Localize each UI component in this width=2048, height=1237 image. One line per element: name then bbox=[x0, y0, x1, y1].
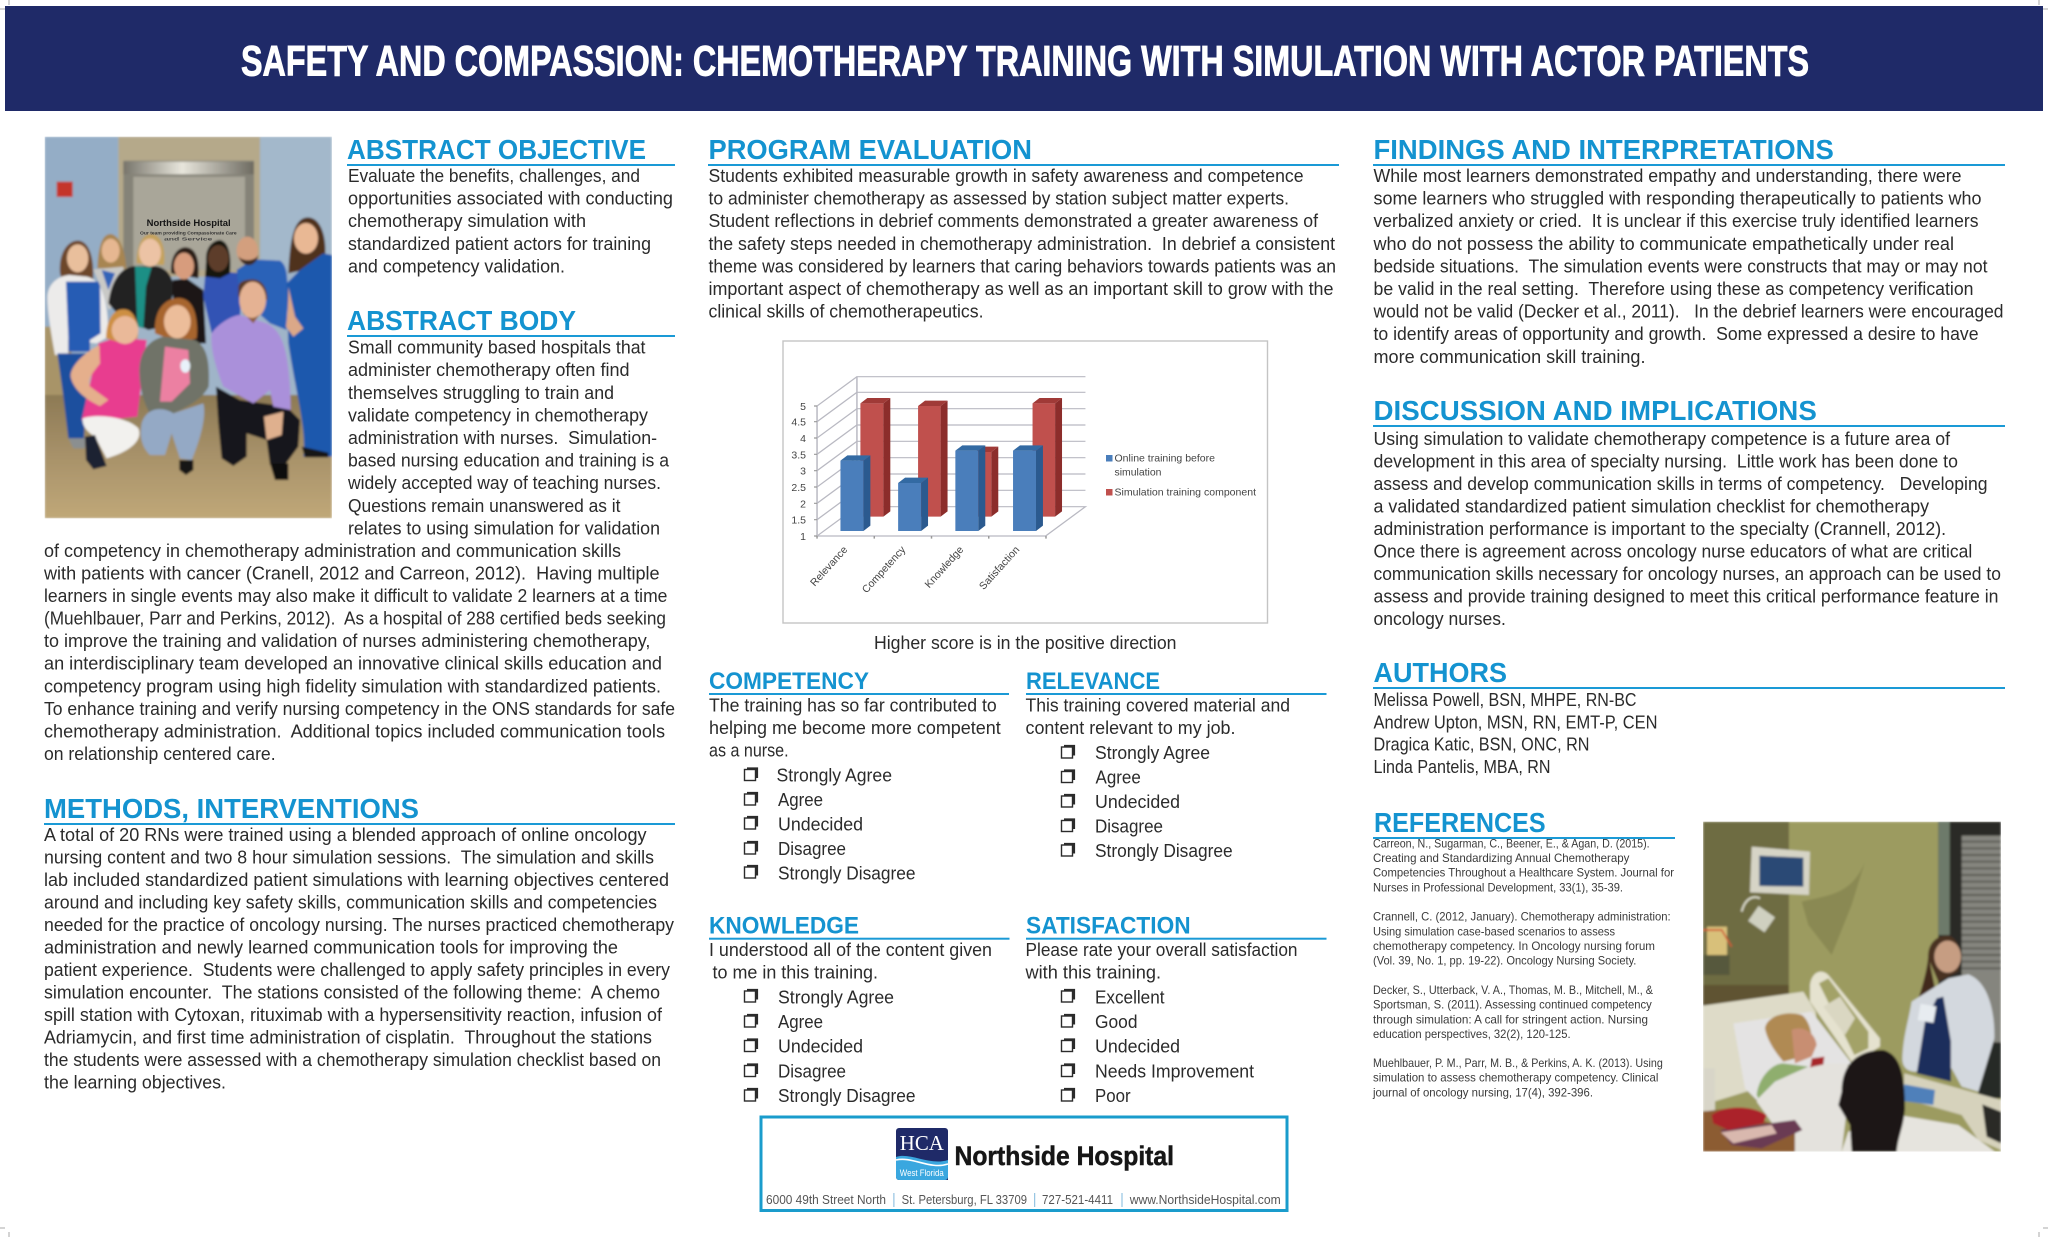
text: methods body: the students were assessed with a chemotherapy simulation checklist based on bbox=[44, 1050, 661, 1070]
back row bbox=[60, 241, 93, 285]
text: knowledge question: I understood all of the content given bbox=[709, 940, 992, 960]
text: methods body: around and including key safety skills, communication skills and competencies bbox=[44, 892, 657, 912]
heading: references: REFERENCES bbox=[1374, 807, 1546, 838]
checklist: relevance options: Disagree bbox=[1095, 817, 1163, 837]
heading: abstract body: ABSTRACT BODY bbox=[347, 305, 576, 336]
panel: findings and interpretations bbox=[1372, 134, 2005, 367]
panel: satisfaction survey bbox=[1024, 912, 1326, 1106]
text: reference list: Carreon, N., Sugarman, C., Beener, E., & Agan, D. (2015). bbox=[1373, 836, 1650, 850]
heading: discussion: DISCUSSION AND IMPLICATIONS bbox=[1374, 395, 1817, 426]
text: abstract objective body: standardized patient actors for training bbox=[348, 234, 651, 254]
chart legend: simulation bbox=[1114, 466, 1162, 478]
text: methods body: A total of 20 RNs were trained using a blended approach of online oncology bbox=[44, 825, 646, 845]
contact details: 727-521-4411 bbox=[1042, 1192, 1113, 1207]
checklist: satisfaction options: Needs Improvement bbox=[1095, 1062, 1254, 1082]
text: abstract body: (Muehlbauer, Parr and Perkins, 2012). As a hospital of 288 certified beds seeking bbox=[44, 609, 666, 629]
text: methods body: needed for the practice of oncology nursing. The nurses practiced chemotherapy bbox=[44, 915, 674, 935]
checklist: competency options: Undecided bbox=[778, 814, 863, 834]
contact details: 6000 49th Street North bbox=[766, 1192, 886, 1207]
panel: abstract body bbox=[43, 305, 675, 764]
panel: methods, interventions bbox=[44, 793, 675, 1093]
text: author names: Dragica Katic, BSN, ONC, RN bbox=[1374, 735, 1590, 755]
text: abstract body bbox=[43, 338, 675, 764]
text: abstract objective body: opportunities associated with conducting bbox=[348, 189, 673, 209]
chart x axis labels: Knowledge bbox=[923, 544, 966, 591]
checklist: satisfaction options: Undecided bbox=[1095, 1036, 1180, 1056]
bar chart: training scores bbox=[783, 341, 1268, 623]
text: abstract body: relates to using simulation for validation bbox=[348, 518, 660, 538]
text: methods body: lab included standardized patient simulations with learning objectives centered bbox=[44, 870, 669, 890]
chart y axis labels: 2 bbox=[800, 498, 806, 510]
photo: hospital room simulation bbox=[1703, 822, 2001, 1152]
text: knowledge question bbox=[709, 940, 992, 982]
text: reference list: journal of oncology nursing, 17(4), 392-396. bbox=[1372, 1085, 1593, 1099]
checklist: competency options bbox=[744, 766, 916, 883]
panel: references bbox=[1372, 807, 1675, 1099]
text: findings body: more communication skill training. bbox=[1374, 347, 1646, 367]
text: abstract body: administration with nurses. Simulation- bbox=[348, 428, 657, 448]
text: abstract body: validate competency in chemotherapy bbox=[348, 405, 648, 425]
chart caption: Higher score is in the positive direction bbox=[874, 633, 1176, 653]
text: discussion body: assess and develop communication skills in terms of competency. Developing bbox=[1374, 474, 1988, 494]
checklist: relevance options: Strongly Disagree bbox=[1095, 841, 1233, 861]
text: methods body: spill station with Cytoxan, rituximab with a hypersensitivity reaction, infusion of bbox=[44, 1005, 663, 1025]
chart y axis labels: 4 bbox=[800, 433, 806, 445]
text: knowledge question: to me in this training. bbox=[712, 962, 878, 982]
text: author names: Andrew Upton, MSN, RN, EMT-P, CEN bbox=[1374, 712, 1658, 732]
text: reference list: Competencies Throughout a Healthcare System. Journal for bbox=[1373, 866, 1674, 880]
text: discussion body: assess and provide training designed to meet this critical performance feature in bbox=[1374, 587, 1998, 607]
text: methods body: simulation encounter. The stations consisted of the following theme: A chemo bbox=[44, 982, 660, 1002]
text: findings body: would not be valid (Decker et al., 2011). In the debrief learners were encouraged bbox=[1373, 302, 2004, 322]
text: discussion body: communication skills necessary for oncology nurses, an approach can be used to bbox=[1374, 564, 2001, 584]
chart x axis labels: Satisfaction bbox=[977, 544, 1022, 592]
text: abstract body: an interdisciplinary team developed an innovative clinical skills education and bbox=[44, 654, 662, 674]
checklist: competency options: Disagree bbox=[778, 839, 846, 859]
text: program evaluation body: to administer chemotherapy as assessed by station subject matter experts. bbox=[708, 189, 1289, 209]
text: reference list: Crannell, C. (2012, January). Chemotherapy administration: bbox=[1373, 910, 1671, 924]
text: reference list: education perspectives, 32(2), 120-125. bbox=[1373, 1027, 1571, 1041]
text: abstract body: to improve the training and validation of nurses administering chemotherapy, bbox=[44, 631, 650, 651]
text: abstract objective body: Evaluate the benefits, challenges, and bbox=[348, 166, 640, 186]
text: reference list: chemotherapy competency. In Oncology nursing forum bbox=[1373, 939, 1655, 953]
text: satisfaction question: with this training. bbox=[1024, 962, 1161, 982]
text: methods body: nursing content and two 8 hour simulation sessions. The simulation and skills bbox=[44, 848, 654, 868]
text: program evaluation body: Students exhibited measurable growth in safety awareness and competence bbox=[708, 166, 1304, 186]
text: discussion body: oncology nurses. bbox=[1374, 609, 1506, 629]
chart x axis labels: Competency bbox=[860, 543, 909, 596]
text: findings body: who do not possess the ability to communicate empathetically under real bbox=[1372, 234, 1954, 254]
text: abstract body: administer chemotherapy often find bbox=[348, 360, 630, 380]
text: abstract body: chemotherapy administration. Additional topics included communication tools bbox=[44, 721, 665, 741]
text: program evaluation body: the safety steps needed in chemotherapy administration. In debrief a consistent bbox=[708, 234, 1335, 254]
text: reference list: Creating and Standardizing Annual Chemotherapy bbox=[1373, 851, 1629, 865]
blue bars: online training bbox=[840, 445, 1043, 531]
text: abstract body: themselves struggling to train and bbox=[348, 383, 614, 403]
checklist: satisfaction options: Good bbox=[1095, 1012, 1138, 1032]
chart y axis labels: 1 bbox=[800, 531, 806, 543]
text: abstract body: learners in single events may also make it difficult to validate 2 learners at a time bbox=[44, 586, 667, 606]
text: abstract body: on relationship centered care. bbox=[44, 744, 276, 764]
checklist: satisfaction options: Poor bbox=[1095, 1086, 1131, 1106]
heading: abstract objective: ABSTRACT OBJECTIVE bbox=[347, 134, 646, 165]
sign text in photo: and Service bbox=[164, 237, 213, 242]
heading: competency: COMPETENCY bbox=[709, 668, 869, 695]
text: findings body: While most learners demonstrated empathy and understanding, there were bbox=[1374, 166, 1962, 186]
text: findings body: to identify areas of opportunity and growth. Some expressed a desire to have bbox=[1374, 324, 1978, 344]
text: discussion body: Once there is agreement across oncology nurse educators of what are critical bbox=[1374, 542, 1972, 562]
text: abstract objective body: and competency validation. bbox=[348, 256, 565, 276]
text: abstract body: To enhance training and verify nursing competency in the ONS standards for safe bbox=[44, 699, 675, 719]
chart y axis labels: 3.5 bbox=[791, 450, 806, 462]
panel: competency survey bbox=[709, 668, 1009, 883]
text: author names: Linda Pantelis, MBA, RN bbox=[1374, 757, 1550, 777]
chart y axis labels: 1.5 bbox=[791, 514, 806, 526]
checklist: knowledge options bbox=[744, 987, 916, 1106]
checklist: knowledge options: Agree bbox=[778, 1012, 823, 1032]
chart y axis labels: 3 bbox=[800, 466, 806, 478]
checklist: knowledge options: Strongly Agree bbox=[778, 987, 894, 1007]
text: abstract objective body bbox=[348, 166, 673, 276]
chart legend: Online training before bbox=[1114, 452, 1215, 464]
heading: methods, interventions: METHODS, INTERVENTIONS bbox=[44, 793, 419, 824]
text: findings body: bedside situations. The simulation events were constructs that may or may not bbox=[1374, 256, 1988, 276]
text: abstract body: widely accepted way of teaching nurses. bbox=[347, 473, 661, 493]
text: reference list: simulation to assess chemotherapy competency. Clinical bbox=[1373, 1071, 1658, 1085]
text: satisfaction question bbox=[1024, 940, 1298, 982]
text: discussion body: a validated standardized patient simulation checklist for chemotherapy bbox=[1374, 496, 1929, 516]
text: abstract body: with patients with cancer (Cranell, 2012 and Carreon, 2012). Having multiple bbox=[43, 564, 660, 584]
title banner bbox=[5, 6, 2043, 111]
panel: authors bbox=[1373, 657, 2005, 777]
text: program evaluation body: clinical skills of chemotherapeutics. bbox=[708, 302, 984, 322]
checklist: satisfaction options: Excellent bbox=[1095, 987, 1164, 1007]
text: reference list bbox=[1372, 836, 1674, 1099]
text: program evaluation body: important aspect of chemotherapy as well as an important skill to grow with the bbox=[708, 279, 1334, 299]
checklist: knowledge options: Strongly Disagree bbox=[778, 1086, 916, 1106]
text: discussion body: development in this area of specialty nursing. Little work has been done to bbox=[1374, 451, 1958, 471]
panel: knowledge survey bbox=[709, 912, 1010, 1106]
text: discussion body: Using simulation to validate chemotherapy competence is a future area of bbox=[1374, 429, 1951, 449]
chart y axis labels: 2.5 bbox=[791, 482, 806, 494]
text: program evaluation body: Student reflections in debrief comments demonstrated a greater awareness of bbox=[708, 211, 1319, 231]
chart legend bbox=[1106, 452, 1256, 498]
text: findings body: some learners who struggled with responding therapeutically to patients who bbox=[1374, 189, 1982, 209]
icon: HCA West Florida logo bbox=[896, 1128, 948, 1180]
text: reference list: Muehlbauer, P. M., Parr, M. B., & Perkins, A. K. (2013). Using bbox=[1373, 1056, 1663, 1070]
text: competency question bbox=[709, 696, 1001, 761]
text: methods body: administration and newly learned communication tools for improving the bbox=[44, 938, 618, 958]
text: methods body bbox=[44, 825, 674, 1093]
text: program evaluation body bbox=[708, 166, 1336, 322]
footer: hospital contact box bbox=[761, 1117, 1287, 1210]
chart y axis labels: 4.5 bbox=[791, 416, 806, 428]
checklist: knowledge options: Undecided bbox=[778, 1036, 863, 1056]
panel: abstract objective bbox=[347, 134, 675, 276]
chart y axis labels bbox=[791, 401, 806, 543]
sign text in photo: Northside Hospital bbox=[147, 218, 231, 228]
text: author names bbox=[1374, 690, 1658, 777]
contact details: St. Petersburg, FL 33709 bbox=[902, 1192, 1027, 1207]
text: reference list: through simulation: A call for stringent action. Nursing bbox=[1373, 1012, 1648, 1026]
panel: relevance survey bbox=[1026, 668, 1326, 861]
heading: program evaluation: PROGRAM EVALUATION bbox=[708, 134, 1032, 165]
text: findings body: be valid in the real setting. Therefore using these as competency verification bbox=[1374, 279, 1974, 299]
checklist: competency options: Strongly Disagree bbox=[778, 863, 916, 883]
text: abstract body: based nursing education and training is a bbox=[348, 451, 670, 471]
text: relevance question bbox=[1026, 696, 1290, 738]
text: discussion body bbox=[1374, 429, 2001, 629]
text: abstract body: Questions remain unanswered as it bbox=[348, 496, 620, 516]
text: reference list: Nurses in Professional Development, 33(1), 35-39. bbox=[1373, 880, 1623, 894]
text: abstract body: of competency in chemotherapy administration and communication skills bbox=[44, 541, 621, 561]
heading: findings: FINDINGS AND INTERPRETATIONS bbox=[1374, 134, 1834, 165]
text: methods body: Adriamycin, and first time administration of cisplatin. Throughout the stations bbox=[44, 1028, 652, 1048]
text: competency question: The training has so far contributed to bbox=[709, 696, 997, 716]
checklist: relevance options bbox=[1062, 743, 1233, 861]
chart y axis labels: 5 bbox=[800, 401, 806, 413]
text: abstract body: competency program using high fidelity simulation with standardized patients. bbox=[44, 676, 661, 696]
contact details bbox=[766, 1192, 1281, 1207]
panel: discussion and implications bbox=[1373, 395, 2005, 629]
text: reference list: Using simulation case-based scenarios to assess bbox=[1373, 924, 1615, 938]
panel: program evaluation bbox=[708, 134, 1339, 322]
checklist: competency options: Agree bbox=[778, 790, 823, 810]
sign text in photo: Our team providing Compassionate Care bbox=[140, 230, 237, 236]
checklist: relevance options: Strongly Agree bbox=[1095, 743, 1210, 763]
heading: authors: AUTHORS bbox=[1374, 657, 1507, 688]
chart x axis labels bbox=[808, 543, 1022, 596]
checklist: satisfaction options bbox=[1062, 987, 1254, 1106]
text: abstract body: Small community based hospitals that bbox=[348, 338, 646, 358]
checklist: relevance options: Agree bbox=[1096, 767, 1141, 787]
heading: satisfaction: SATISFACTION bbox=[1026, 912, 1191, 939]
checklist: competency options: Strongly Agree bbox=[776, 766, 892, 786]
text: methods body: patient experience. Students were challenged to apply safety principles in every bbox=[44, 960, 670, 980]
text: relevance question: content relevant to my job. bbox=[1026, 718, 1236, 738]
text: competency question: helping me become more competent bbox=[709, 718, 1001, 738]
icon: HCA West Florida logo: West Florida bbox=[900, 1168, 944, 1179]
photo: hospital team group bbox=[45, 137, 332, 518]
icon: HCA West Florida logo: HCA bbox=[900, 1131, 945, 1155]
checklist: knowledge options: Disagree bbox=[778, 1062, 846, 1082]
text: author names: Melissa Powell, BSN, MHPE, RN-BC bbox=[1374, 690, 1636, 710]
checklist: relevance options: Undecided bbox=[1095, 792, 1180, 812]
chart legend: Simulation training component bbox=[1114, 486, 1256, 498]
text: relevance question: This training covered material and bbox=[1026, 696, 1290, 716]
front row bbox=[82, 337, 147, 420]
contact details: www.NorthsideHospital.com bbox=[1129, 1192, 1281, 1207]
text: program evaluation body: theme was considered by learners that caring behaviors towards patients was an bbox=[708, 256, 1336, 276]
text: reference list: Decker, S., Utterback, V. A., Thomas, M. B., Mitchell, M., & bbox=[1373, 983, 1653, 997]
heading: relevance: RELEVANCE bbox=[1026, 668, 1160, 695]
text: findings body: verbalized anxiety or cried. It is unclear if this exercise truly identified learners bbox=[1374, 211, 1978, 231]
text: reference list: (Vol. 39, No. 1, pp. 19-22). Oncology Nursing Society. bbox=[1373, 954, 1636, 968]
text: discussion body: administration performance is important to the specialty (Crannell, 2012). bbox=[1374, 519, 1946, 539]
text: competency question: as a nurse. bbox=[709, 741, 789, 761]
text: methods body: the learning objectives. bbox=[44, 1073, 226, 1093]
hospital name: Northside Hospital bbox=[954, 1141, 1174, 1171]
text: reference list: Sportsman, S. (2011). Assessing continued competency bbox=[1373, 998, 1652, 1012]
text: satisfaction question: Please rate your overall satisfaction bbox=[1026, 940, 1298, 960]
heading: knowledge: KNOWLEDGE bbox=[709, 912, 859, 939]
text: findings body bbox=[1372, 166, 2004, 367]
red bars: simulation training component bbox=[860, 398, 1062, 517]
sign text in photo bbox=[140, 220, 236, 240]
text: abstract objective body: chemotherapy simulation with bbox=[348, 211, 586, 231]
chart x axis labels: Relevance bbox=[808, 544, 850, 589]
